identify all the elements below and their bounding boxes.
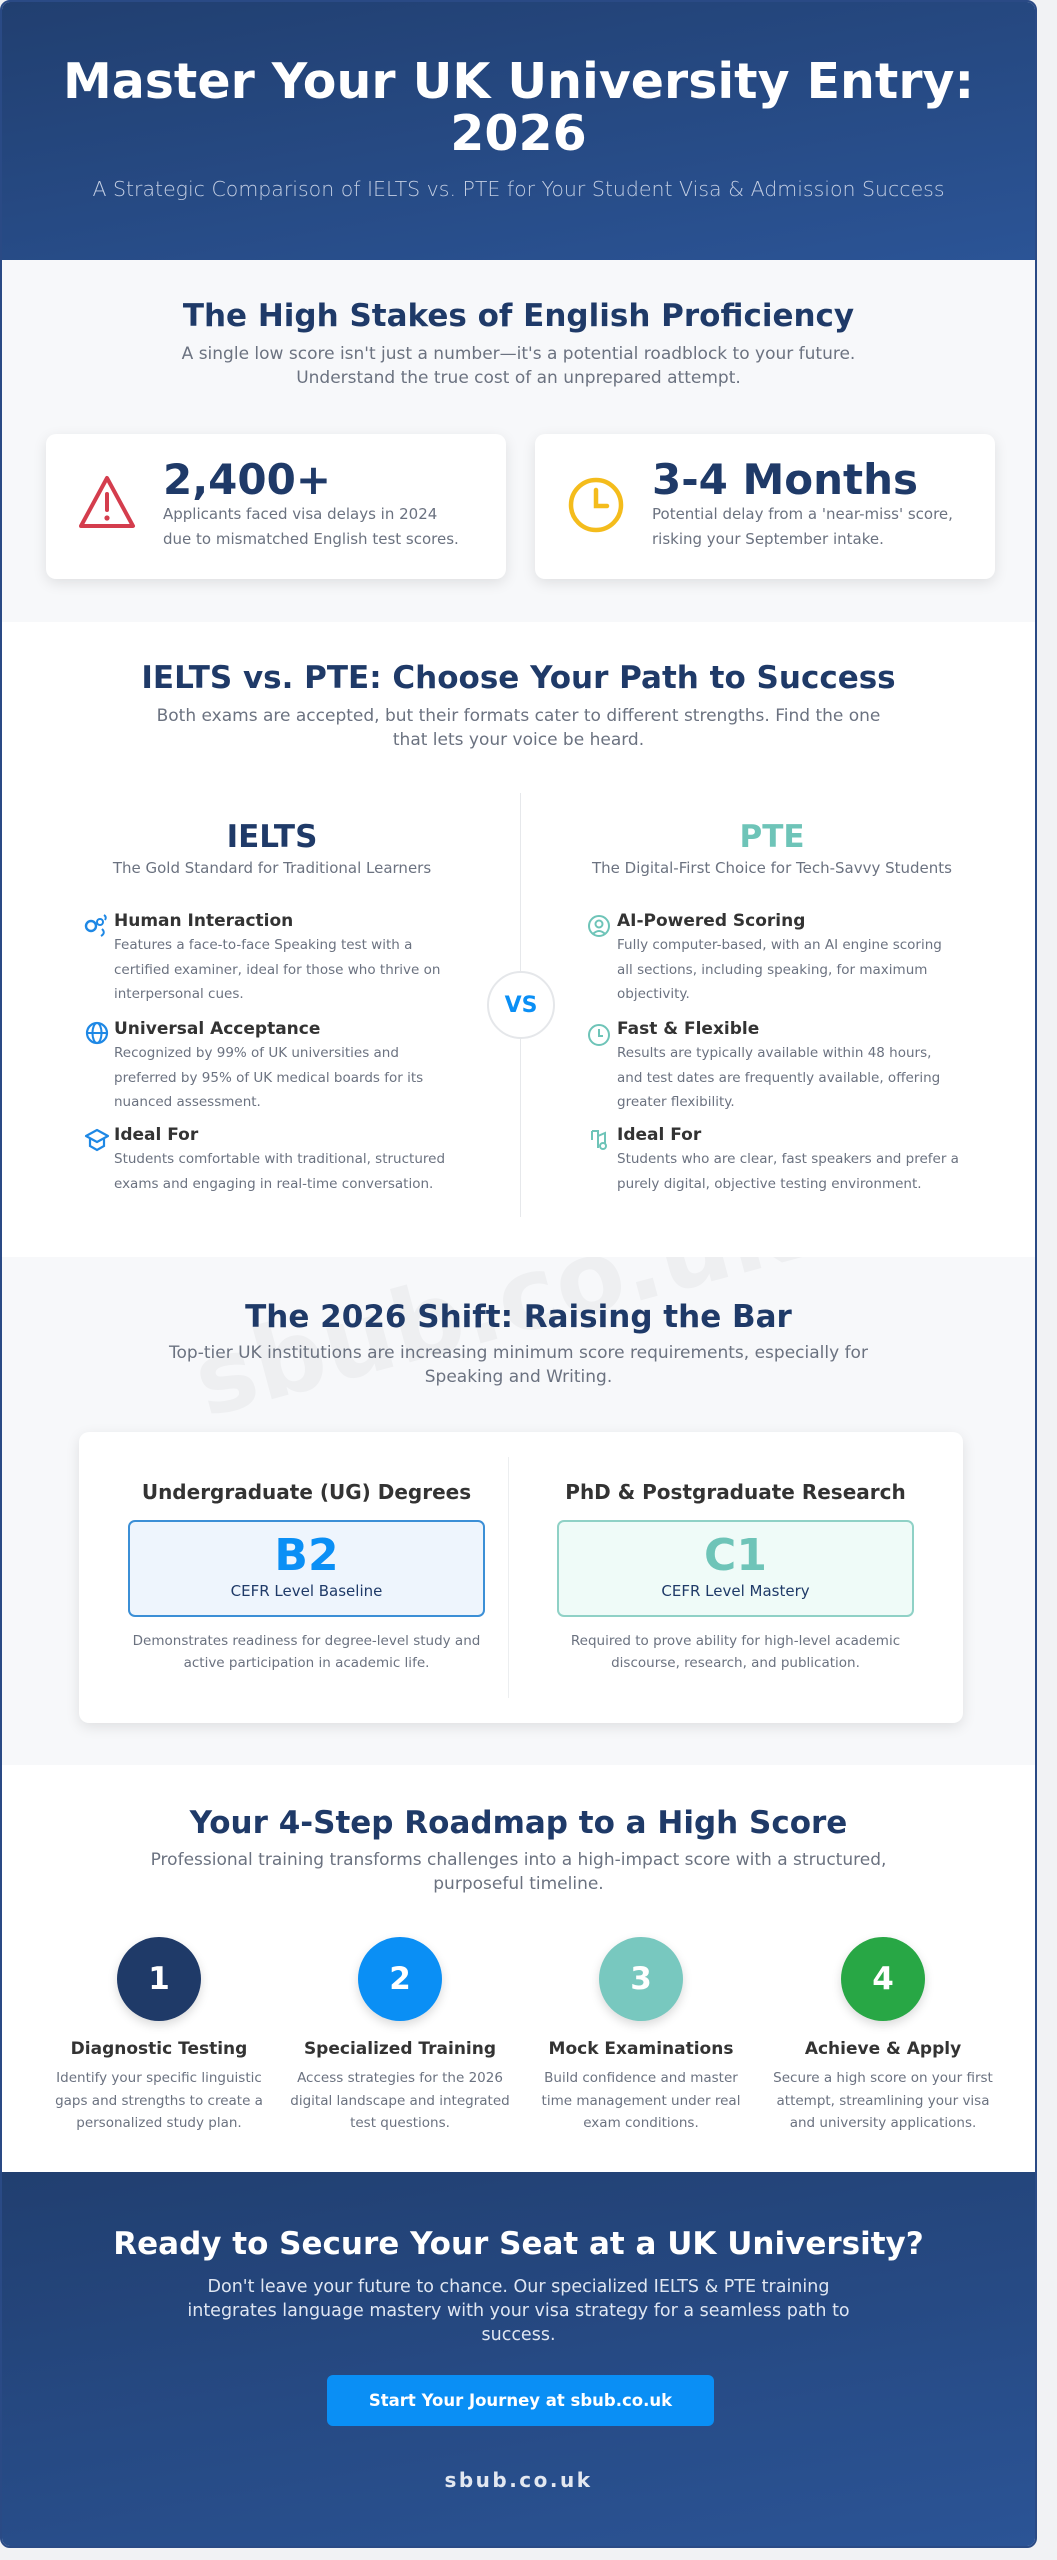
icon: AI xyxy=(588,915,610,937)
item: fast & flexible: Results are typically available within 48 hours, xyxy=(617,1045,931,1061)
stat text xyxy=(163,455,459,548)
item: fast & flexible: and test dates are frequently available, offering xyxy=(617,1070,940,1086)
B2 box: B2 xyxy=(274,1530,339,1581)
intro text: purposeful timeline. xyxy=(433,1874,604,1894)
item: ideal for xyxy=(84,1125,445,1192)
section: IELTS vs PTE xyxy=(2,622,1035,1257)
column: PhD: discourse, research, and publication. xyxy=(611,1655,860,1671)
stat text: 3-4 Months xyxy=(652,455,918,504)
step 2: Access strategies for the 2026 xyxy=(297,2070,503,2086)
heading: IELTS vs. PTE: Choose Your Path to Success xyxy=(141,660,896,696)
item: fast & flexible xyxy=(588,1019,940,1110)
CTA text: success. xyxy=(481,2325,556,2345)
step 4: 4 xyxy=(872,1961,894,1997)
icon: people xyxy=(84,914,107,937)
section: 2026 shift xyxy=(2,1257,1035,1765)
step 4: attempt, streamlining your visa xyxy=(776,2092,990,2108)
column: IELTS xyxy=(84,819,445,1192)
IELTS title: IELTS xyxy=(227,819,317,855)
column: undergraduate xyxy=(128,1480,485,1671)
stat text xyxy=(652,455,953,548)
icon: warning xyxy=(79,476,136,528)
step 4 xyxy=(773,1937,993,2131)
item: universal acceptance: Universal Acceptance xyxy=(114,1019,320,1039)
step 3: exam conditions. xyxy=(583,2115,699,2131)
vs badge xyxy=(487,971,555,1039)
intro text xyxy=(182,344,855,388)
stat text: Applicants faced visa delays in 2024 xyxy=(163,505,437,523)
title xyxy=(63,53,974,162)
step 1 xyxy=(55,1937,263,2131)
CTA heading: Ready to Secure Your Seat at a UK University? xyxy=(113,2226,924,2262)
title: Master Your UK University Entry: xyxy=(63,53,974,110)
item: ideal for: Ideal For xyxy=(617,1125,701,1145)
column: undergraduate: Undergraduate (UG) Degrees xyxy=(142,1480,471,1504)
step 4: Achieve & Apply xyxy=(805,2039,961,2059)
icon: graduation cap xyxy=(84,1128,110,1152)
step 3 xyxy=(542,1937,740,2131)
step 1: 1 xyxy=(148,1961,170,1997)
PTE title: PTE xyxy=(739,819,805,855)
intro text xyxy=(157,706,880,750)
step 1: gaps and strengths to create a xyxy=(55,2092,263,2108)
column: PhD: Required to prove ability for high-level academic xyxy=(571,1633,900,1649)
intro text: Top-tier UK institutions are increasing minimum score requirements, especially for xyxy=(169,1343,868,1363)
step 1: Identify your specific linguistic xyxy=(56,2070,262,2086)
intro text: Speaking and Writing. xyxy=(425,1367,612,1387)
step 1: personalized study plan. xyxy=(76,2115,242,2131)
stat card: visa delays xyxy=(46,434,506,579)
intro text: Both exams are accepted, but their formats cater to different strengths. Find the one xyxy=(157,706,880,726)
intro text: Understand the true cost of an unprepared attempt. xyxy=(296,368,741,388)
section: high stakes xyxy=(2,260,1035,622)
CTA text xyxy=(187,2277,850,2345)
C1 box xyxy=(557,1520,914,1617)
step 4: Secure a high score on your first xyxy=(773,2070,993,2086)
stat text: Potential delay from a 'near-miss' score, xyxy=(652,505,953,523)
item: human interaction: Features a face-to-face Speaking test with a xyxy=(114,937,412,953)
step 3: 3 xyxy=(630,1961,652,1997)
item: universal acceptance: Recognized by 99% of UK universities and xyxy=(114,1045,399,1061)
divider xyxy=(520,793,521,1217)
column: PhD: PhD & Postgraduate Research xyxy=(565,1480,906,1504)
C1 box: CEFR Level Mastery xyxy=(661,1582,810,1600)
item: AI scoring: AI-Powered Scoring xyxy=(617,911,805,931)
item: fast & flexible: Fast & Flexible xyxy=(617,1019,759,1039)
item: ideal for: exams and engaging in real-time conversation. xyxy=(114,1176,433,1192)
B2 box: CEFR Level Baseline xyxy=(231,1582,382,1600)
item: ideal for: purely digital, objective testing environment. xyxy=(617,1176,922,1192)
column: undergraduate: active participation in academic life. xyxy=(184,1655,429,1671)
item: human interaction: Human Interaction xyxy=(114,911,293,931)
item: universal acceptance xyxy=(86,1019,423,1110)
item: AI scoring: all sections, including speaking, for maximum xyxy=(617,962,927,978)
stat text: due to mismatched English test scores. xyxy=(163,530,459,548)
title: 2026 xyxy=(450,105,587,162)
item: AI scoring: objectivity. xyxy=(617,986,690,1002)
stat text: risking your September intake. xyxy=(652,530,884,548)
step 2: digital landscape and integrated xyxy=(290,2092,510,2108)
item: human interaction xyxy=(84,911,440,1002)
divider xyxy=(508,1457,509,1698)
vs badge: VS xyxy=(505,992,537,1018)
item: ideal for: Students who are clear, fast speakers and prefer a xyxy=(617,1151,959,1167)
footer CTA xyxy=(2,2172,1035,2550)
requirements card xyxy=(79,1432,963,1723)
item: universal acceptance: preferred by 95% of UK medical boards for its xyxy=(114,1070,423,1086)
item: human interaction: interpersonal cues. xyxy=(114,986,244,1002)
C1 box: C1 xyxy=(704,1530,767,1581)
intro text xyxy=(151,1850,886,1894)
step 3: time management under real xyxy=(542,2092,740,2108)
item: human interaction: certified examiner, ideal for those who thrive on xyxy=(114,962,440,978)
intro text: that lets your voice be heard. xyxy=(393,730,644,750)
item: ideal for: Ideal For xyxy=(114,1125,198,1145)
step 2 xyxy=(290,1937,510,2131)
step 4: and university applications. xyxy=(790,2115,976,2131)
CTA button: Start Your Journey at sbub.co.uk xyxy=(369,2391,672,2410)
subtitle: A Strategic Comparison of IELTS vs. PTE for Your Student Visa & Admission Success xyxy=(92,177,945,201)
item: AI scoring xyxy=(588,911,942,1002)
item: universal acceptance: nuanced assessment. xyxy=(114,1094,261,1110)
step 3: Build confidence and master xyxy=(544,2070,738,2086)
IELTS tagline: The Gold Standard for Traditional Learners xyxy=(113,859,431,877)
CTA button xyxy=(327,2375,714,2426)
icon: person xyxy=(591,1130,607,1150)
item: fast & flexible: greater flexibility. xyxy=(617,1094,735,1110)
column: PTE xyxy=(588,819,959,1192)
footer brand: sbub.co.uk xyxy=(444,2468,593,2492)
CTA text: Don't leave your future to chance. Our specialized IELTS & PTE training xyxy=(208,2277,829,2297)
step 3: Mock Examinations xyxy=(549,2039,733,2059)
item: ideal for: Students comfortable with traditional, structured xyxy=(114,1151,445,1167)
column: undergraduate: Demonstrates readiness for degree-level study and xyxy=(133,1633,480,1649)
PTE tagline: The Digital-First Choice for Tech-Savvy Students xyxy=(592,859,952,877)
heading: The High Stakes of English Proficiency xyxy=(183,298,854,334)
step 2: test questions. xyxy=(350,2115,450,2131)
header banner xyxy=(2,2,1035,260)
intro text: Professional training transforms challenges into a high-impact score with a structured, xyxy=(151,1850,886,1870)
B2 box xyxy=(128,1520,485,1617)
intro text: A single low score isn't just a number—it's a potential roadblock to your future. xyxy=(182,344,855,364)
stat text: 2,400+ xyxy=(163,455,331,504)
icon: clock xyxy=(588,1024,610,1046)
CTA text: integrates language mastery with your visa strategy for a seamless path to xyxy=(187,2301,850,2321)
step 2: 2 xyxy=(389,1961,411,1997)
column: PhD xyxy=(557,1480,914,1671)
icon: clock xyxy=(568,478,624,532)
heading: Your 4-Step Roadmap to a High Score xyxy=(190,1805,847,1841)
intro text xyxy=(168,1343,868,1387)
icon: globe xyxy=(86,1022,108,1044)
section: roadmap xyxy=(2,1765,1035,2172)
item: AI scoring: Fully computer-based, with an AI engine scoring xyxy=(617,937,942,953)
stat card: months delay xyxy=(535,434,995,579)
step 1: Diagnostic Testing xyxy=(71,2039,247,2059)
heading: The 2026 Shift: Raising the Bar xyxy=(245,1299,792,1335)
item: ideal for xyxy=(591,1125,959,1192)
step 2: Specialized Training xyxy=(304,2039,496,2059)
